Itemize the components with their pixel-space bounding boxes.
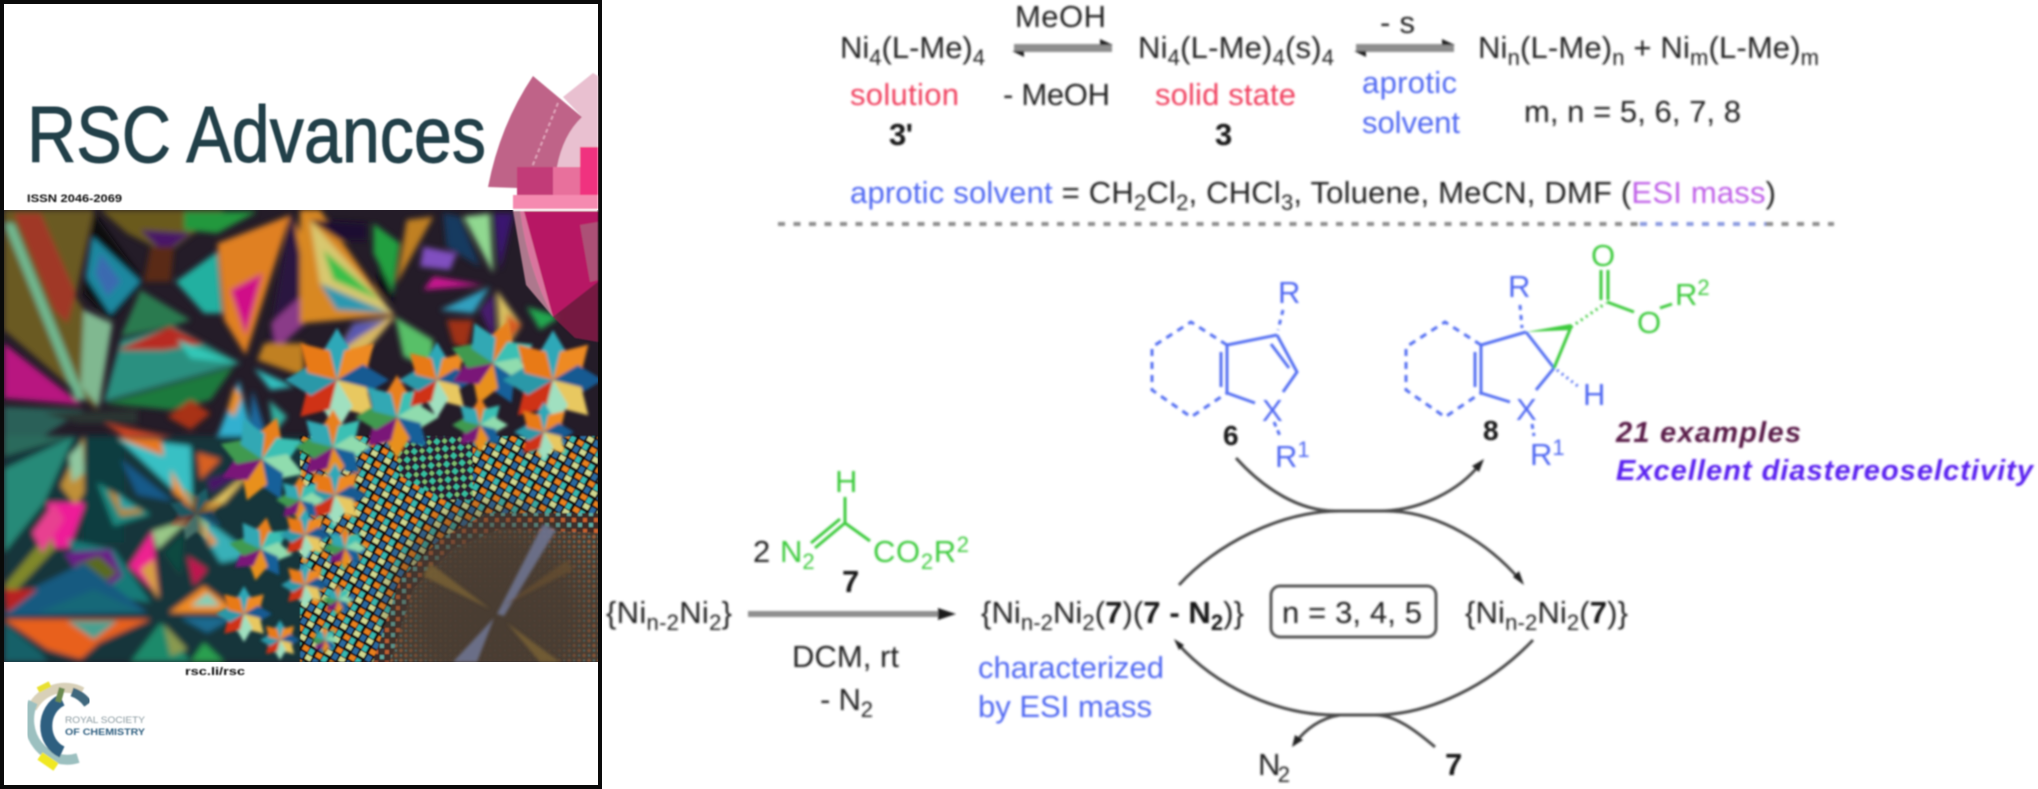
cover artwork: kaleidoscopic pattern (4, 210, 603, 662)
label: 7 added: 7 (1445, 747, 1462, 782)
lower right fine pattern (300, 436, 600, 662)
cover footer small print: rsc.li/rsc (185, 666, 245, 678)
reagent: diazo compound 7: 2 (802, 549, 815, 574)
reagent: diazo compound 7 (753, 464, 969, 599)
atom labels: X (1262, 393, 1283, 428)
reaction conditions: minus N2: - N (820, 682, 861, 717)
aprotic solvent list: , CHCl (1189, 175, 1281, 210)
compound 3' formula: Ni (840, 30, 869, 65)
label: aprotic: aprotic (1362, 65, 1457, 100)
atom labels: R (1508, 269, 1530, 304)
intermediate cluster: 2 (1211, 610, 1223, 635)
atom labels: X (1516, 392, 1537, 427)
products formula: n (1508, 45, 1520, 70)
atom labels: 1 (1552, 435, 1565, 460)
atom labels: R (1530, 437, 1552, 472)
atom labels: O (1591, 238, 1615, 273)
intermediate cluster: n-2 (1021, 610, 1053, 635)
intermediate cluster: {Ni (981, 595, 1021, 630)
label: 3 prime: 3' (889, 117, 913, 152)
products formula: m (1690, 45, 1708, 70)
label: N2 released: N (1258, 747, 1280, 782)
compound 3 formula: Ni (1138, 30, 1167, 65)
atom labels: H (1583, 377, 1605, 412)
reagent: diazo compound 7: 7 (842, 564, 859, 599)
compound 3' formula: 4 (869, 45, 882, 70)
callout: excellent diastereoselectivity: Excellent diastereoselctivity (1616, 455, 2035, 487)
reaction conditions: minus N2: 2 (861, 697, 873, 722)
starting cluster: n-2 (647, 610, 679, 635)
star bursts (160, 307, 603, 660)
box: n values (1271, 586, 1436, 637)
aprotic solvent list: ESI mass) (1631, 175, 1776, 210)
panel: journal cover (2, 2, 603, 787)
starting cluster: 2 (709, 610, 721, 635)
reagent: diazo compound 7: H (835, 464, 857, 499)
logo wordmark: ROYAL SOCIETY (65, 715, 145, 725)
reagent: diazo compound 7: 2 (921, 549, 933, 574)
structure: substrate 6 (1152, 275, 1310, 474)
arrow: upper cycle arc (1179, 511, 1524, 585)
aprotic solvent list: , Toluene, MeCN, DMF ( (1293, 175, 1632, 210)
cover decoration: pink arcs (488, 73, 598, 342)
logo wordmark: OF CHEMISTRY (65, 727, 145, 737)
aprotic solvent list: 2 (1134, 190, 1146, 215)
compound 3' formula: 4 (973, 45, 985, 70)
note: by ESI mass: by ESI mass (978, 689, 1152, 724)
publisher logo (29, 684, 145, 767)
cover title: RSC Advances (27, 90, 486, 179)
atom labels (1483, 238, 1710, 472)
products formula: Ni (1478, 30, 1507, 65)
starting cluster: Ni (679, 595, 709, 630)
reagent minus s: - s (1380, 5, 1415, 40)
reagent minus MeOH: - MeOH (1003, 77, 1110, 112)
products formula: (L-Me) (1520, 30, 1612, 65)
products formula: (L-Me) (1708, 30, 1801, 65)
cover frame (2, 2, 600, 787)
arrow: substrate to product arc (1236, 458, 1484, 511)
atom labels: R (1675, 277, 1697, 312)
note: characterized: characterized (978, 650, 1164, 685)
arrow: reaction (748, 608, 956, 620)
intermediate cluster: )} (1223, 595, 1244, 630)
cover small print: ISSN 2046-2069 (27, 193, 122, 205)
resting cluster: 2 (1567, 610, 1579, 635)
aprotic solvent list: 2 (1176, 190, 1188, 215)
starting cluster: } (722, 595, 732, 630)
products formula: m (1801, 45, 1819, 70)
aprotic solvent list: 3 (1281, 190, 1293, 215)
compound 3 formula: 4 (1168, 45, 1180, 70)
arrow: equilibrium 1 (1012, 39, 1113, 57)
compound 3 formula: (s) (1285, 30, 1322, 65)
panel: scheme (606, 0, 2035, 787)
label: solvent: solvent (1362, 105, 1460, 140)
compound 3' formula: (L-Me) (882, 30, 973, 65)
arrow: N2 release arc (1292, 715, 1435, 747)
resting cluster: ( (1579, 595, 1590, 630)
aprotic solvent list: aprotic solvent = CH (850, 175, 1134, 210)
resting cluster: {Ni (1465, 595, 1505, 630)
intermediate cluster: ( (1095, 595, 1106, 630)
atom labels: 8 (1483, 415, 1499, 446)
products formula: + Ni (1625, 30, 1690, 65)
reagent: diazo compound 7: R (934, 534, 956, 569)
atom labels: R (1275, 439, 1297, 474)
compound 3 formula: 4 (1273, 45, 1285, 70)
callout: 21 examples: 21 examples (1615, 417, 1801, 449)
atom labels (1223, 275, 1310, 474)
atom labels: 1 (1297, 437, 1310, 462)
panel: equilibrium equation (840, 0, 1819, 152)
arrow: equilibrium 2 (1354, 39, 1455, 57)
products formula: n (1612, 45, 1624, 70)
arrow: lower cycle arc (1174, 639, 1533, 715)
atom labels: O (1637, 305, 1661, 340)
label: solid state: solid state (1155, 77, 1296, 112)
reagent: diazo compound 7: 2 (957, 532, 969, 557)
box: n values: n = 3, 4, 5 (1282, 595, 1422, 630)
intermediate cluster: Ni (1053, 595, 1082, 630)
reagent: diazo compound 7: 2 (753, 534, 770, 569)
m and n values: m, n = 5, 6, 7, 8 (1524, 94, 1741, 129)
label: 3: 3 (1215, 117, 1232, 152)
reagent: diazo compound 7: CO (873, 534, 920, 569)
logo wordmark (65, 715, 145, 737)
starting cluster: {Ni (606, 595, 646, 630)
resting cluster: Ni (1537, 595, 1567, 630)
resting cluster: n-2 (1505, 610, 1537, 635)
atom labels: 6 (1223, 420, 1239, 451)
reagent MeOH: MeOH (1015, 0, 1106, 34)
aprotic solvent list: Cl (1146, 175, 1176, 210)
intermediate cluster: 2 (1082, 610, 1095, 635)
label: N2 released: 2 (1278, 762, 1290, 787)
atom labels: R (1278, 275, 1300, 310)
compound 3 formula: 4 (1322, 45, 1334, 70)
compound 3 formula: (L-Me) (1180, 30, 1272, 65)
intermediate cluster: 7)(7 - N (1105, 595, 1211, 630)
label: solution: solution (850, 77, 959, 112)
resting cluster: 7)} (1590, 595, 1628, 630)
reagent: diazo compound 7: N (780, 534, 802, 569)
structure: product 8 (1406, 238, 1710, 472)
atom labels: 2 (1697, 275, 1710, 300)
reaction conditions: DCM, rt: DCM, rt (792, 639, 899, 674)
catalytic cycle arcs (1174, 458, 1533, 747)
